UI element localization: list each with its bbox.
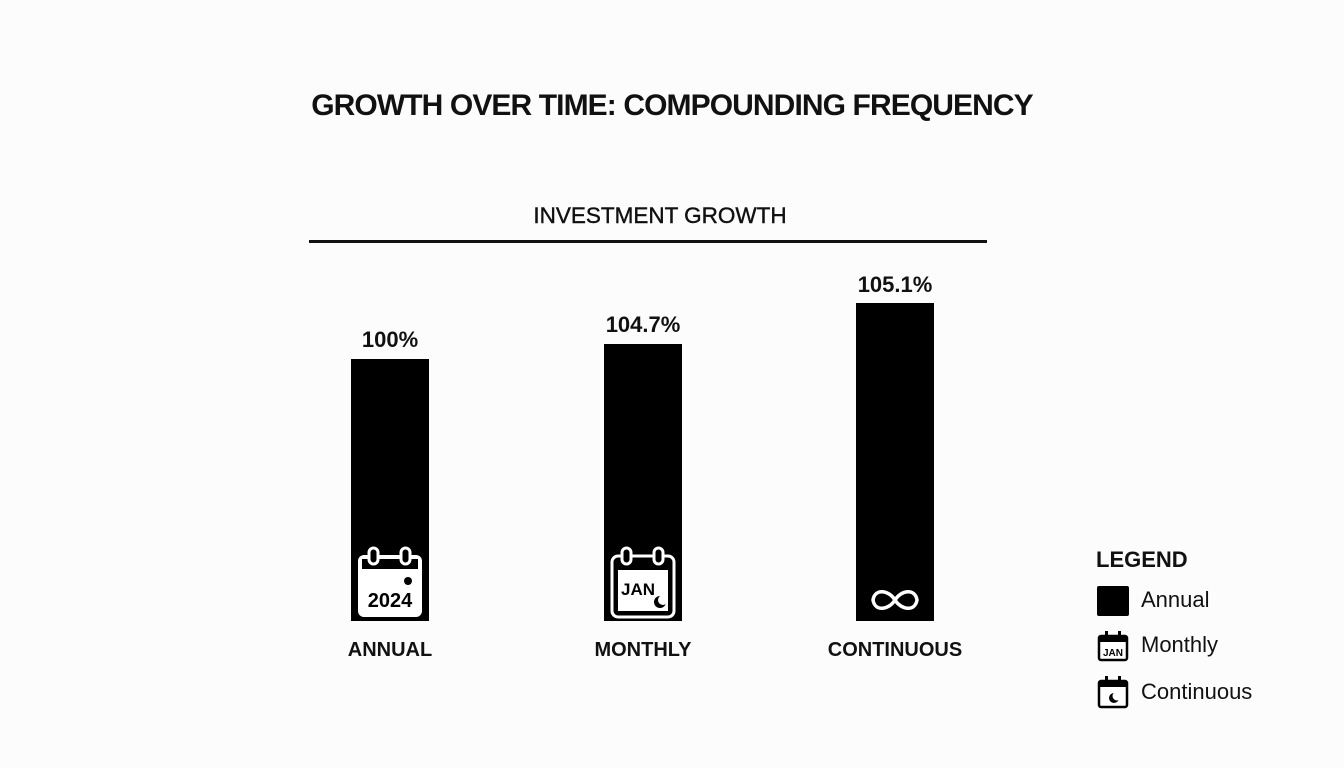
- icon: JAN calendar: JAN: [621, 580, 655, 599]
- legend item: monthly: [1098, 631, 1218, 662]
- icon: 2024 calendar: 2024: [368, 590, 413, 612]
- icon: 2024 calendar: [358, 546, 422, 617]
- label: monthly: MONTHLY: [594, 639, 692, 661]
- label: continuous: CONTINUOUS: [828, 639, 962, 661]
- bar: continuous: [828, 272, 962, 661]
- legend item: annual: [1097, 586, 1210, 616]
- bar chart: [348, 272, 962, 661]
- bar: annual: [348, 327, 432, 661]
- value: continuous: 105.1%: [858, 272, 932, 297]
- legend item: continuous: Continuous: [1141, 679, 1252, 704]
- title: GROWTH OVER TIME: COMPOUNDING FREQUENCY: [311, 89, 1033, 122]
- legend item: monthly: JAN: [1103, 648, 1123, 659]
- legend: [1096, 547, 1252, 708]
- legend item: monthly: Monthly: [1141, 632, 1218, 657]
- value: annual: 100%: [362, 327, 418, 352]
- chart subtitle: INVESTMENT GROWTH: [533, 203, 787, 228]
- legend item: continuous: [1098, 676, 1252, 708]
- legend item: annual: Annual: [1141, 587, 1210, 612]
- value: monthly: 104.7%: [606, 312, 680, 337]
- legend title: LEGEND: [1096, 547, 1188, 572]
- label: annual: ANNUAL: [348, 639, 432, 661]
- icon: infinity: [871, 590, 919, 610]
- icon: JAN calendar: [610, 546, 676, 618]
- bar: monthly: [594, 312, 692, 661]
